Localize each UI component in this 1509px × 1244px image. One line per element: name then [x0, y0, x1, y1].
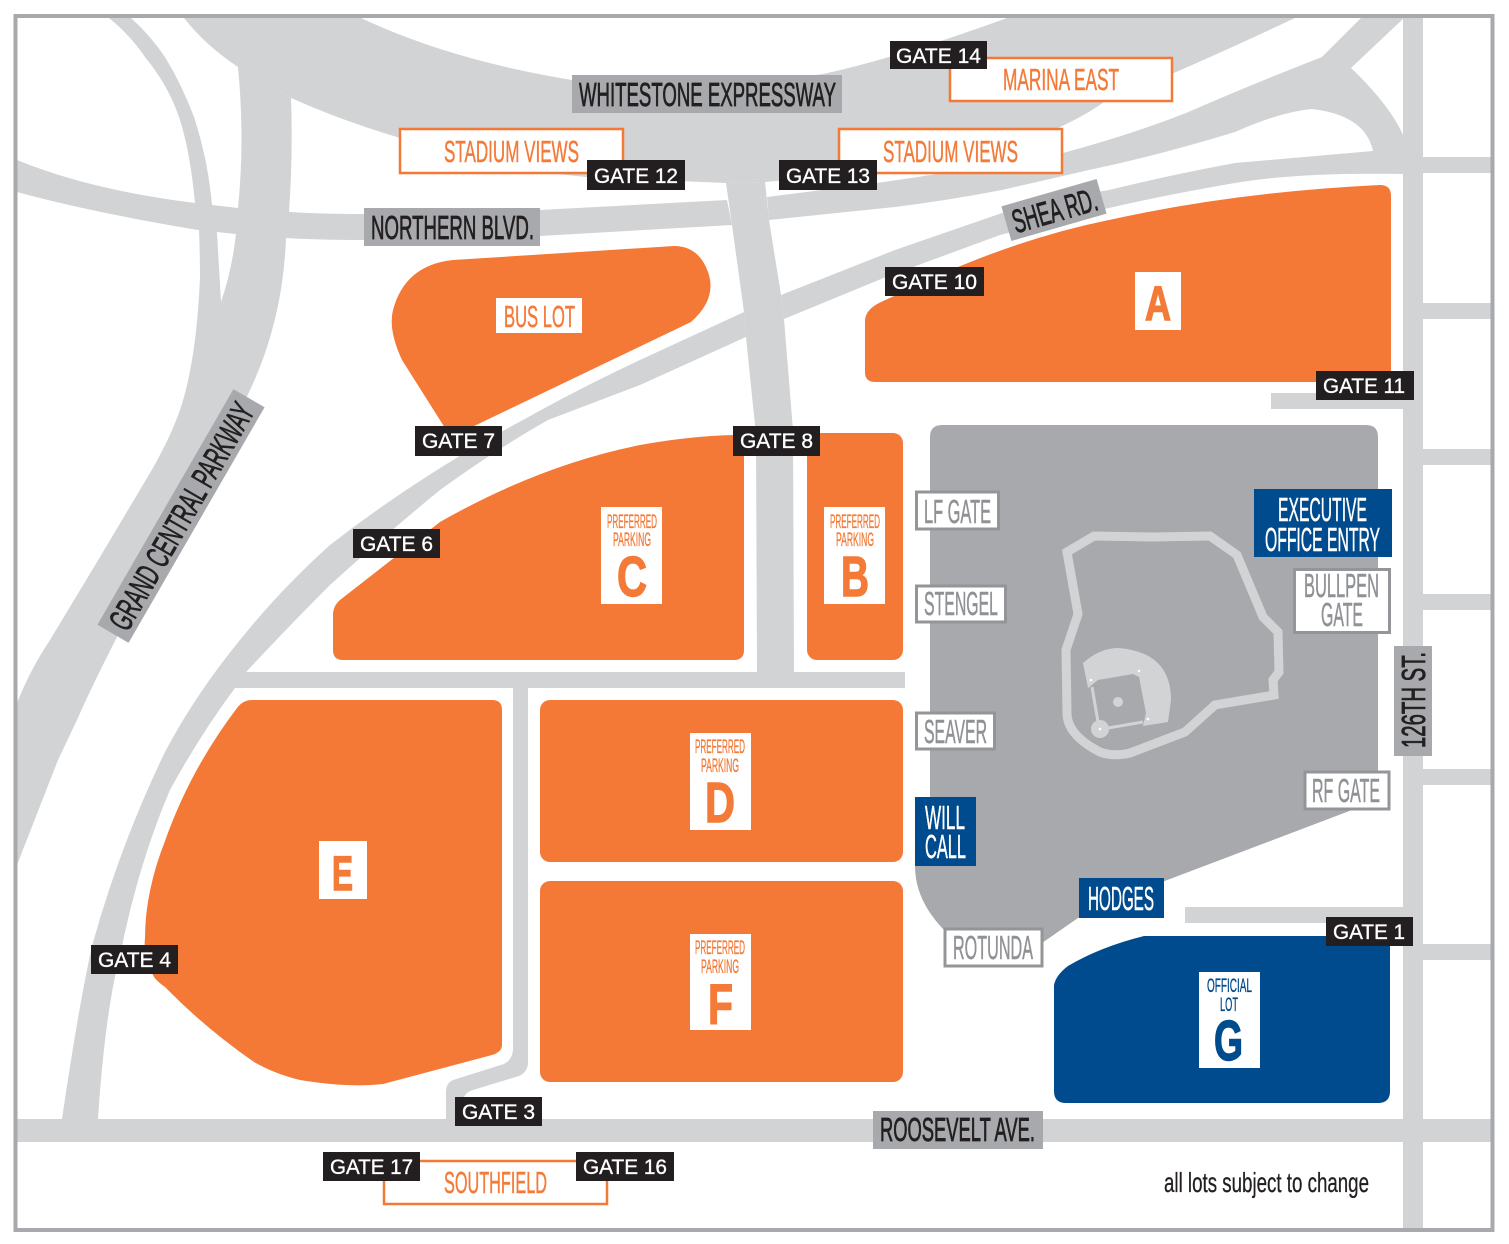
gate 10: GATE 10 — [892, 271, 977, 294]
gate 16: GATE 16 — [583, 1156, 667, 1179]
stadium gate: Rotunda — [945, 929, 1042, 966]
gate 10 — [885, 267, 984, 296]
road label: Grand Central Parkway: GRAND CENTRAL PARKWAY — [101, 396, 261, 636]
lot: bus lot — [392, 246, 711, 428]
lot: A: A — [1145, 278, 1171, 331]
lot: G official — [1054, 936, 1390, 1103]
offsite lot: Stadium Views west: STADIUM VIEWS — [444, 134, 579, 169]
stadium gate: Stengel: STENGEL — [924, 585, 998, 622]
road label: Whitestone Expressway: WHITESTONE EXPRESSWAY — [579, 76, 836, 113]
stadium gate: Seaver — [916, 713, 994, 750]
offsite lot: Stadium Views east — [839, 129, 1062, 173]
entry: Will Call — [915, 797, 976, 866]
gate 17 — [323, 1152, 420, 1181]
offsite lot: Stadium Views east: STADIUM VIEWS — [883, 134, 1018, 169]
offsite lot: Southfield: SOUTHFIELD — [444, 1165, 547, 1200]
lot: A — [865, 185, 1391, 382]
gate 1: GATE 1 — [1333, 921, 1405, 944]
gate 1 — [1326, 917, 1413, 946]
lot: B: PARKING — [836, 530, 874, 551]
entry: Will Call: WILL — [925, 799, 965, 836]
entry: Executive Office Entry — [1254, 489, 1392, 558]
offsite lot: Southfield — [384, 1161, 607, 1204]
lot: F: PREFERRED — [695, 938, 745, 959]
stadium gate: RF Gate: RF GATE — [1312, 772, 1380, 809]
stadium gate: Bullpen Gate — [1294, 567, 1390, 633]
lot: G official: LOT — [1220, 995, 1238, 1016]
stadium gate: RF Gate — [1305, 772, 1389, 809]
road label: Whitestone Expressway — [572, 75, 842, 113]
entry: Executive Office Entry: OFFICE ENTRY — [1265, 521, 1380, 558]
gate 13: GATE 13 — [786, 165, 870, 188]
lot: G official: OFFICIAL — [1207, 976, 1252, 997]
offsite lot: Marina East — [950, 58, 1172, 101]
entry: Executive Office Entry: EXECUTIVE — [1278, 491, 1367, 528]
offsite lot: Marina East: MARINA EAST — [1003, 62, 1119, 97]
lot: D: PREFERRED — [695, 737, 745, 758]
gate 11: GATE 11 — [1323, 375, 1405, 398]
gate 4: GATE 4 — [98, 949, 171, 972]
lot: D: PARKING — [701, 756, 739, 777]
stadium gate: Seaver: SEAVER — [924, 713, 987, 750]
lot: G official: G — [1214, 1009, 1243, 1073]
gate 12: GATE 12 — [594, 165, 678, 188]
lot: F: F — [708, 973, 733, 1037]
gate 6: GATE 6 — [360, 533, 433, 556]
gate 8: GATE 8 — [740, 430, 813, 453]
lot: C: PREFERRED — [607, 512, 657, 533]
gate 7 — [415, 426, 502, 456]
stadium gate: Stengel — [916, 585, 1006, 622]
lot: E: E — [332, 848, 353, 901]
gate 7: GATE 7 — [422, 430, 495, 453]
gate 4 — [91, 945, 178, 974]
gate 14: GATE 14 — [896, 45, 981, 68]
road label: 126th St: 126TH ST. — [1395, 652, 1432, 748]
gate 12 — [587, 160, 685, 190]
gate 8 — [733, 426, 820, 456]
gate 3: GATE 3 — [462, 1101, 535, 1124]
lot: C — [333, 435, 744, 660]
lot: C: C — [617, 545, 647, 609]
lot: bus lot: BUS LOT — [504, 299, 575, 334]
gate 3 — [455, 1097, 542, 1126]
gate 16 — [576, 1152, 674, 1181]
ballfield — [1066, 536, 1279, 755]
road label: Roosevelt Ave — [873, 1111, 1043, 1149]
lot: C: PARKING — [613, 530, 651, 551]
stadium gate: Bullpen Gate: GATE — [1321, 596, 1363, 633]
road label: 126th St — [1394, 646, 1432, 756]
road label: Grand Central Parkway — [97, 389, 265, 643]
lot: E — [145, 700, 502, 1085]
entry: Hodges: HODGES — [1088, 880, 1154, 917]
stadium gate: Bullpen Gate: BULLPEN — [1304, 567, 1379, 604]
road label: Roosevelt Ave: ROOSEVELT AVE. — [880, 1111, 1035, 1148]
lot: F: PARKING — [701, 957, 739, 978]
note: lots subject to change: all lots subject to change — [1164, 1167, 1369, 1198]
gate 6 — [353, 529, 440, 558]
road label: Northern Blvd — [364, 208, 540, 246]
gate 17: GATE 17 — [330, 1156, 413, 1179]
road label: Northern Blvd: NORTHERN BLVD. — [371, 209, 534, 246]
road label: Shea Rd: SHEA RD. — [1008, 181, 1102, 240]
gate 13 — [779, 160, 877, 190]
entry: Will Call: CALL — [925, 828, 966, 865]
offsite lot: Stadium Views west — [400, 129, 623, 173]
stadium gate: LF Gate: LF GATE — [924, 493, 991, 530]
lot: B: B — [841, 545, 869, 609]
lot: D — [540, 700, 903, 862]
stadium footprint — [915, 425, 1378, 960]
entry: Hodges — [1079, 878, 1164, 918]
gate 11 — [1316, 371, 1414, 400]
road label: Shea Rd — [1001, 179, 1107, 242]
lot: F — [540, 881, 903, 1082]
lot: B — [807, 433, 903, 660]
lot: B: PREFERRED — [830, 512, 880, 533]
stadium gate: LF Gate — [916, 492, 998, 530]
stadium gate: Rotunda: ROTUNDA — [953, 929, 1033, 966]
lot: D: D — [705, 771, 735, 835]
